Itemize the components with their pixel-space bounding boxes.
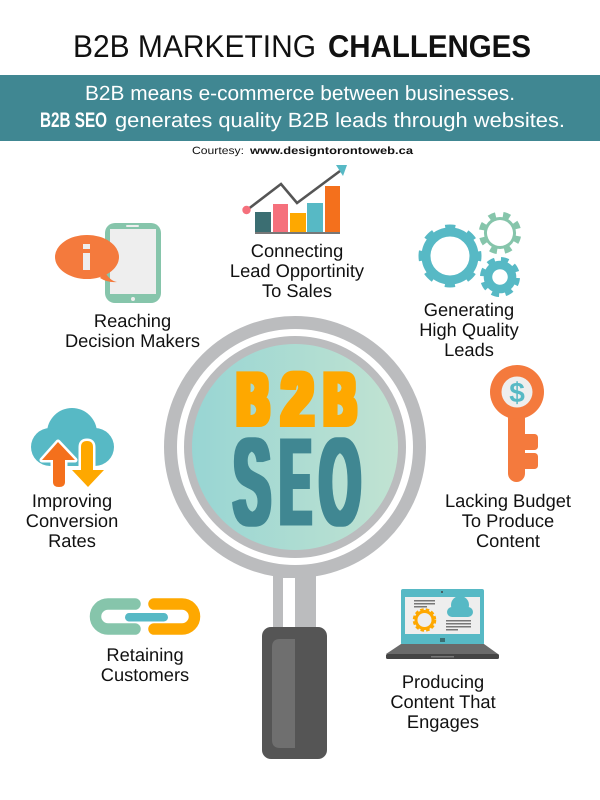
lens text: B2B (238, 357, 356, 441)
banner (0, 75, 600, 141)
icon: key with dollar (490, 365, 544, 482)
label: lacking budget: To Produce (462, 510, 554, 531)
label: reaching decision makers: Reaching (94, 310, 171, 331)
courtesy line: www.designtorontoweb.ca (249, 145, 413, 157)
lens text: B2B: B (324, 357, 356, 441)
label: producing content: Producing (402, 671, 484, 692)
label: producing content: Engages (407, 711, 479, 732)
label: connecting lead opportunity: Connecting (251, 240, 343, 261)
label: retaining customers: Retaining (106, 644, 184, 665)
label: connecting lead opportunity: To Sales (262, 280, 332, 301)
courtesy line: Courtesy: (192, 145, 244, 157)
label: reaching decision makers: Decision Makers (65, 330, 200, 351)
label: generating high quality leads: Generating (424, 299, 514, 320)
handle grip (262, 627, 327, 759)
label: improving conversion rates: Improving (32, 490, 112, 511)
label: improving conversion rates: Conversion (26, 510, 118, 531)
title: CHALLENGES (328, 28, 531, 64)
lens text: B2B: B (238, 357, 268, 441)
magnifying glass (170, 322, 420, 759)
title (73, 28, 531, 64)
lens text: SEO (234, 413, 360, 552)
label: generating high quality leads: Leads (444, 339, 494, 360)
icon: gears (421, 209, 524, 298)
icon: chain links (95, 604, 194, 629)
label: improving conversion rates: Rates (48, 530, 96, 551)
icon: laptop (386, 589, 499, 659)
banner: B2B SEO (40, 109, 107, 132)
lens text: SEO: E (280, 413, 311, 552)
label: producing content: Content That (390, 691, 496, 712)
courtesy line (192, 145, 413, 157)
lens rings (170, 322, 420, 572)
handle shaft (273, 570, 316, 630)
label: lacking budget: Content (476, 530, 540, 551)
icon: cloud with arrows (31, 408, 114, 487)
label: generating high quality leads: High Quality (419, 319, 520, 340)
magnifying glass: O (320, 413, 360, 552)
label: retaining customers: Customers (101, 664, 189, 685)
lens text: B2B: 2 (282, 357, 313, 441)
lens text: SEO: S (234, 413, 270, 552)
icon: line and bar chart (242, 165, 347, 234)
label: connecting lead opportunity: Lead Opportinity (230, 260, 365, 281)
banner: generates quality B2B leads through websites. (115, 109, 565, 132)
banner: B2B means e-commerce between businesses. (85, 82, 515, 105)
label: lacking budget: Lacking Budget (445, 490, 571, 511)
title: B2B MARKETING (73, 28, 316, 64)
icon: tablet with info bubble (55, 223, 161, 303)
icon: key with dollar: $ (509, 377, 525, 408)
